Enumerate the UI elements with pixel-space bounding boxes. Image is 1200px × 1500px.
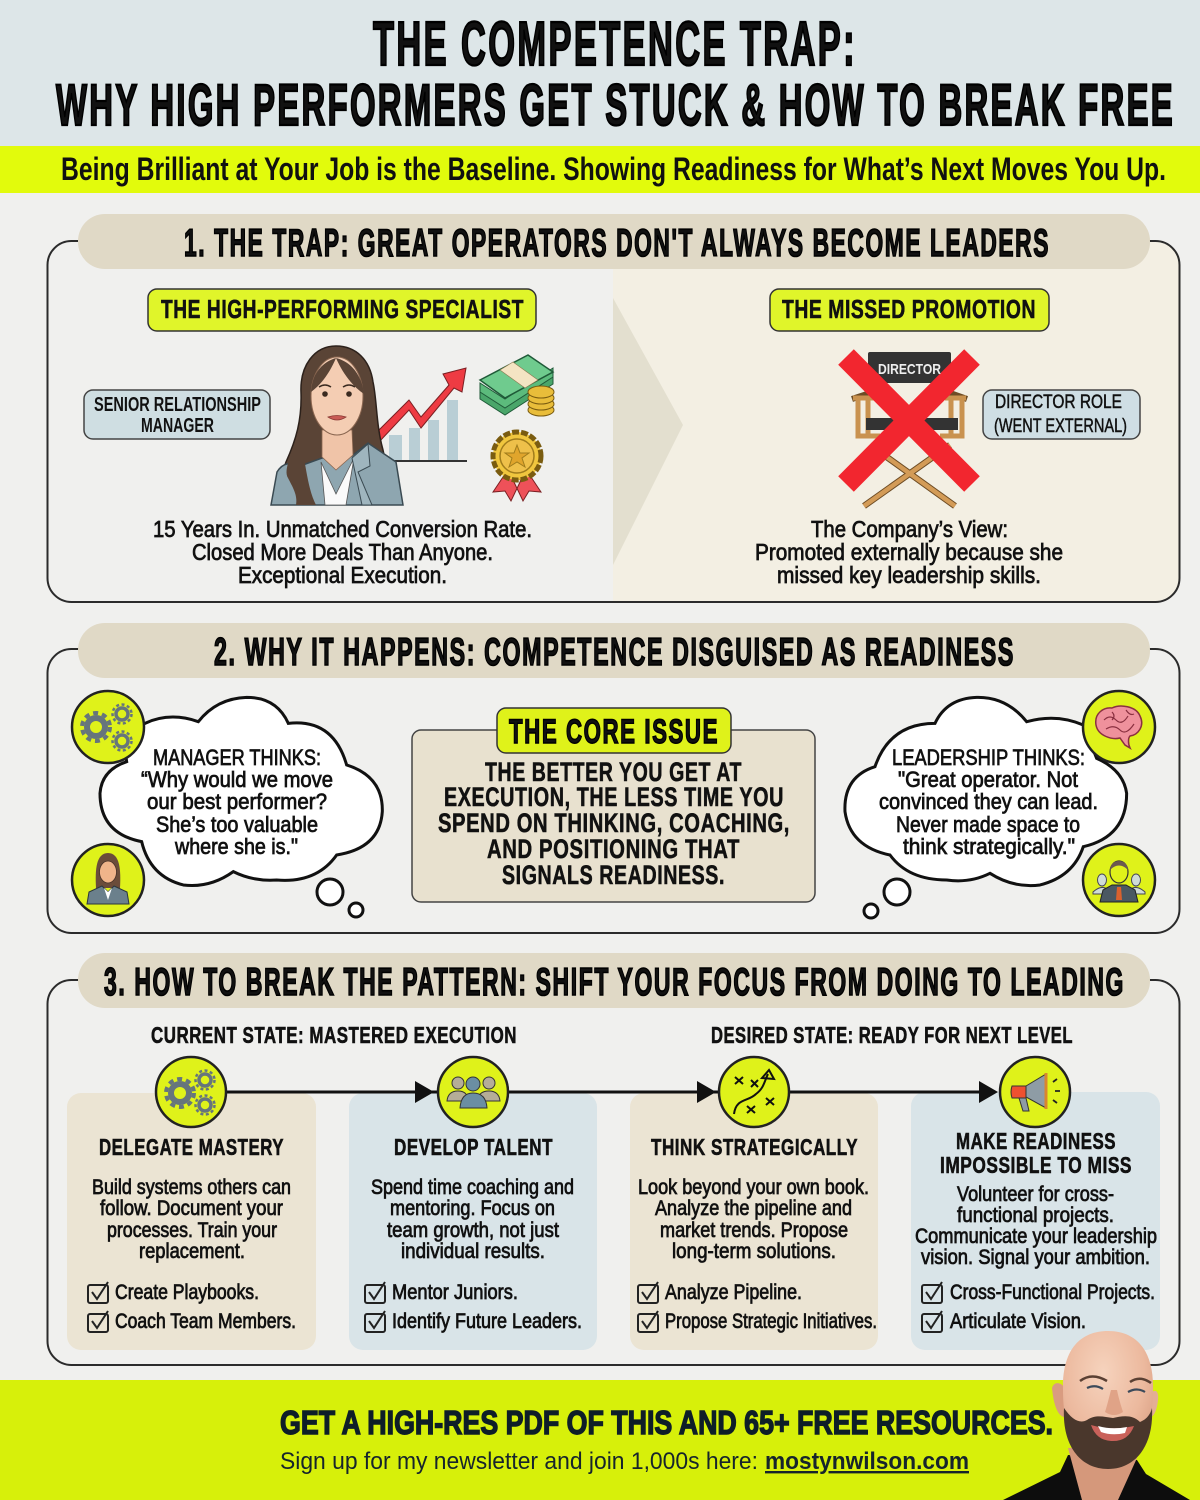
label: director role went external: DIRECTOR ROLE	[995, 392, 1122, 413]
icon: leader with team in lime circle	[1083, 844, 1155, 916]
callout: the core issue	[412, 708, 815, 902]
card: delegate mastery: Build systems others can	[92, 1176, 291, 1199]
callout: the core issue: THE CORE ISSUE	[509, 713, 719, 751]
card: make readiness impossible to miss: Cross-Functional Projects.	[950, 1281, 1155, 1304]
card: develop talent: Identify Future Leaders.	[392, 1310, 582, 1333]
label: senior relationship manager: SENIOR RELATIONSHIP	[94, 394, 261, 416]
icon: megaphone	[1000, 1057, 1070, 1127]
card: develop talent: individual results.	[401, 1240, 545, 1263]
title	[56, 10, 1175, 138]
panel: section 2 why it happens	[48, 623, 1180, 933]
card: develop talent: Mentor Juniors.	[392, 1281, 518, 1304]
card: think strategically: Look beyond your own book.	[638, 1176, 869, 1199]
icon: strategy play	[719, 1057, 789, 1127]
icon: team group	[438, 1057, 508, 1127]
card: make readiness impossible to miss: Volunteer for cross-	[957, 1183, 1114, 1206]
thought bubble: leadership thinks: Never made space to	[896, 812, 1080, 837]
icon: woman professional	[271, 346, 403, 505]
icon: crossed-out director chair: DIRECTOR	[878, 361, 941, 378]
callout: the core issue: SIGNALS READINESS.	[502, 860, 725, 890]
icon: award medal	[493, 432, 541, 501]
label: senior relationship manager	[84, 390, 270, 439]
card: develop talent: mentoring. Focus on	[390, 1197, 555, 1220]
thought bubble: manager thinks: our best performer?	[147, 789, 327, 814]
card: make readiness impossible to miss: MAKE READINESS	[956, 1128, 1116, 1154]
card: make readiness impossible to miss: IMPOSSIBLE TO MISS	[940, 1152, 1132, 1178]
text: the company's view	[755, 516, 1063, 588]
text: the company's view: Promoted externally because she	[755, 539, 1063, 565]
card: think strategically	[630, 1093, 878, 1350]
card: develop talent: Spend time coaching and	[371, 1176, 574, 1199]
card: think strategically: Propose Strategic Initiatives.	[665, 1310, 877, 1333]
thought bubble: leadership thinks: think strategically."	[903, 834, 1075, 859]
icon: money stack and coins	[480, 355, 554, 416]
icon: brain in lime circle	[1083, 691, 1155, 763]
callout: the core issue: AND POSITIONING THAT	[487, 834, 740, 864]
thought bubble: leadership thinks: LEADERSHIP THINKS:	[892, 745, 1085, 770]
footer call to action: mostynwilson.com	[765, 1448, 969, 1475]
icon: gears	[156, 1057, 226, 1127]
icon: businesswoman in lime circle	[72, 844, 144, 916]
card: develop talent: team growth, not just	[387, 1219, 559, 1242]
bar chart with rising arrow	[372, 368, 467, 461]
text: specialist achievements: 15 Years In. Unmatched Conversion Rate.	[153, 516, 532, 542]
card: think strategically: long-term solutions.	[672, 1240, 836, 1263]
label: desired state: DESIRED STATE: READY FOR NEXT LEVEL	[711, 1022, 1073, 1048]
header band	[0, 0, 1200, 146]
thought bubble: manager thinks: “Why would we move	[141, 767, 333, 792]
label: the missed promotion	[770, 289, 1049, 331]
card: delegate mastery	[67, 1093, 316, 1350]
thought bubble: leadership thinks: convinced they can lead.	[879, 789, 1098, 814]
callout: the core issue: SPEND ON THINKING, COACHING,	[438, 808, 790, 838]
card: make readiness impossible to miss	[911, 1092, 1160, 1350]
label: senior relationship manager: MANAGER	[141, 415, 214, 437]
thought bubble: manager thinks: MANAGER THINKS:	[153, 745, 321, 770]
footer call to action: Sign up for my newsletter and join 1,000s here:	[280, 1448, 758, 1475]
card: delegate mastery: follow. Document your	[100, 1197, 283, 1220]
thought bubble: leadership thinks	[845, 697, 1127, 918]
section 1 heading	[78, 214, 1150, 269]
callout: the core issue: EXECUTION, THE LESS TIME YOU	[444, 782, 784, 812]
card: make readiness impossible to miss: functional projects.	[957, 1204, 1114, 1227]
text: specialist achievements: Closed More Deals Than Anyone.	[192, 539, 493, 565]
card: think strategically: Analyze Pipeline.	[665, 1281, 802, 1304]
card: think strategically: market trends. Propose	[660, 1219, 848, 1242]
thought bubble: manager thinks: where she is."	[174, 834, 298, 859]
text: specialist achievements: Exceptional Execution.	[238, 562, 447, 588]
label: current state: CURRENT STATE: MASTERED EXECUTION	[151, 1022, 517, 1048]
label: the high-performing specialist	[148, 289, 536, 331]
label: the missed promotion: THE MISSED PROMOTION	[782, 294, 1036, 324]
icon: crossed-out director chair	[846, 352, 972, 506]
card: make readiness impossible to miss: vision. Signal your ambition.	[921, 1246, 1150, 1269]
card: delegate mastery: replacement.	[139, 1240, 245, 1263]
card: make readiness impossible to miss: Articulate Vision.	[950, 1310, 1086, 1333]
arrow: progress timeline	[191, 1081, 998, 1103]
card: develop talent	[349, 1093, 597, 1350]
card: delegate mastery: Create Playbooks.	[115, 1281, 259, 1304]
panel: section 1 the trap	[48, 214, 1180, 602]
card: develop talent: DEVELOP TALENT	[394, 1134, 553, 1160]
callout: the core issue: THE BETTER YOU GET AT	[485, 757, 742, 787]
label: the high-performing specialist: THE HIGH-PERFORMING SPECIALIST	[161, 294, 524, 324]
icon: gears in lime circle	[72, 691, 144, 763]
thought bubble: manager thinks: She’s too valuable	[156, 812, 318, 837]
portrait: smiling bald man	[1003, 1331, 1190, 1500]
card: think strategically: THINK STRATEGICALLY	[651, 1134, 858, 1160]
footer call to action	[0, 1380, 1200, 1500]
card: delegate mastery: DELEGATE MASTERY	[99, 1134, 284, 1160]
label: director role went external	[983, 390, 1140, 439]
card: think strategically: Analyze the pipeline and	[655, 1197, 852, 1220]
thought bubble: leadership thinks: "Great operator. Not	[898, 767, 1078, 792]
card: make readiness impossible to miss: Communicate your leadership	[915, 1225, 1157, 1248]
section 2 heading	[78, 623, 1150, 678]
card: delegate mastery: Coach Team Members.	[115, 1310, 296, 1333]
thought bubble: manager thinks	[100, 697, 382, 917]
label: director role went external: (WENT EXTERNAL)	[994, 416, 1127, 437]
text: specialist achievements	[153, 516, 532, 588]
card: delegate mastery: processes. Train your	[107, 1219, 277, 1242]
panel: section 3 how to break the pattern	[48, 953, 1180, 1365]
text: the company's view: missed key leadership skills.	[777, 562, 1041, 588]
text: the company's view: The Company’s View:	[811, 516, 1008, 542]
